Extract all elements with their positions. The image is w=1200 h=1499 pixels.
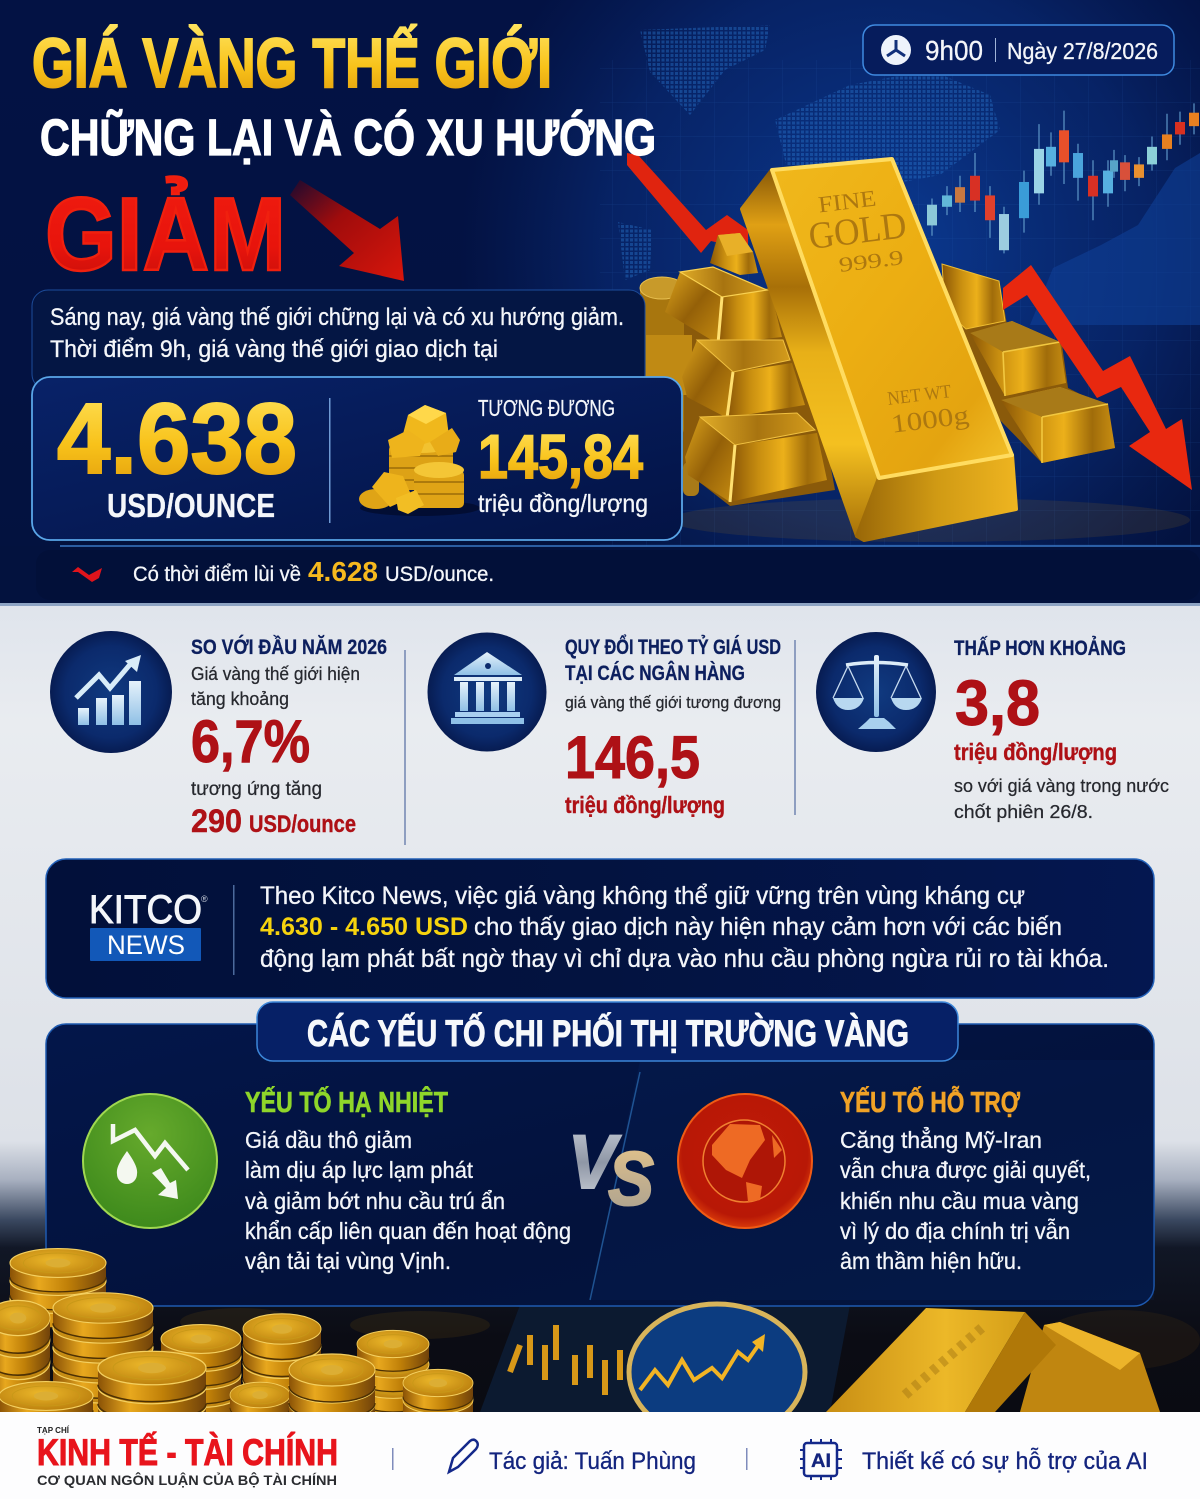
big value: 146,5 <box>565 724 700 791</box>
support text: khiến nhu cầu mua vàng <box>840 1188 1079 1214</box>
unit VND: triệu đồng/lượng <box>478 490 648 518</box>
cooling text: làm dịu áp lực lạm phát <box>245 1157 474 1183</box>
unit: USD/ounce <box>249 811 356 838</box>
coin stacks bottom left <box>0 1249 473 1439</box>
unit: triệu đồng/lượng <box>565 792 725 818</box>
unit USD/ounce: USD/OUNCE <box>107 487 275 524</box>
unit: triệu đồng/lượng <box>954 739 1117 765</box>
support text: vẫn chưa được giải quyết, <box>840 1157 1091 1183</box>
icon: AI chip: AI <box>811 1451 831 1472</box>
logo: Kitco News <box>89 888 208 961</box>
heading line 1: QUY ĐỔI THEO TỶ GIÁ USD <box>565 635 781 659</box>
logo: magazine <box>37 1426 338 1488</box>
bar engraving: NET WT <box>886 381 953 410</box>
stat column 3 <box>816 632 1169 822</box>
bar engraving: 1000g <box>889 400 970 439</box>
icon: clock <box>881 35 911 65</box>
cooling text: Giá dầu thô giảm <box>245 1127 412 1153</box>
left bar 2 <box>665 267 782 344</box>
gold bars bottom right <box>826 1308 1160 1412</box>
title: white line: CHỮNG LẠI VÀ CÓ XU HƯỚNG <box>40 108 656 166</box>
left bar 3 <box>682 340 805 418</box>
body: tăng khoảng <box>191 689 289 709</box>
cooling text: khẩn cấp liên quan đến hoạt động <box>245 1218 571 1244</box>
section heading pill <box>257 1002 958 1061</box>
author: Tác giả: Tuấn Phùng <box>489 1448 696 1475</box>
left bar top <box>710 233 758 275</box>
bottom scene <box>180 1305 1200 1412</box>
body: chốt phiên 26/8. <box>954 802 1093 822</box>
logo: magazine: TẠP CHÍ <box>37 1426 70 1435</box>
panel: factors <box>46 1024 1154 1306</box>
logo: magazine: CƠ QUAN NGÔN LUẬN CỦA BỘ TÀI CHÍNH <box>37 1471 337 1488</box>
quote line 3: động lạm phát bất ngờ thay vì chỉ dựa vào nhu cầu phòng ngừa rủi ro tài khóa. <box>260 945 1109 973</box>
price USD: 4.638 <box>57 383 297 495</box>
icon: globe <box>678 1094 812 1228</box>
quote highlight: 4.630 - 4.650 USD <box>260 913 468 941</box>
hero background <box>0 0 1200 606</box>
stat column 1 <box>50 631 387 839</box>
rear cylinder <box>640 277 699 496</box>
logo: magazine: KINH TẾ - TÀI CHÍNH <box>37 1432 338 1473</box>
footer <box>0 1412 1200 1499</box>
pile shadow mass <box>640 278 835 506</box>
title: red word: GIẢM <box>45 177 286 293</box>
icon: falling oil <box>83 1094 217 1228</box>
low point strip <box>36 550 1200 600</box>
quote line 2: cho thấy giao dịch này hiện nhạy cảm hơn với các biến <box>474 913 1062 941</box>
lower falling red arrow <box>1003 265 1192 490</box>
cooling text <box>245 1127 571 1274</box>
panel: Kitco quote <box>46 859 1154 998</box>
time badge <box>863 25 1174 75</box>
page background: light lower section <box>0 600 1200 1420</box>
vs mark: S <box>608 1137 654 1222</box>
logo: Kitco News: NEWS <box>107 930 185 960</box>
right stack backing <box>950 270 1115 463</box>
support text: vì lý do địa chính trị vẫn <box>840 1218 1070 1244</box>
heading: support factor: YẾU TỐ HỖ TRỢ <box>840 1085 1020 1119</box>
equivalent label: TƯƠNG ĐƯƠNG <box>478 395 615 421</box>
icon: growth chart <box>50 631 172 753</box>
body: so với giá vàng trong nước <box>954 776 1169 796</box>
low unit: USD/ounce. <box>385 563 494 586</box>
cooling text: vận tải tại vùng Vịnh. <box>245 1248 451 1274</box>
intro text panel <box>32 290 645 390</box>
logo: Kitco News: ® <box>201 894 208 904</box>
low text: Có thời điểm lùi về <box>133 563 301 586</box>
icon: bank <box>428 632 546 752</box>
cooling text: và giảm bớt nhu cầu trú ẩn <box>245 1188 505 1214</box>
value: 290 <box>191 803 242 839</box>
intro line 2: Thời điểm 9h, giá vàng thế giới giao dịch tại <box>50 336 498 363</box>
section heading text: CÁC YẾU TỐ CHI PHỐI THỊ TRƯỜNG VÀNG <box>307 1012 909 1054</box>
stat column 2 <box>428 632 781 818</box>
vs mark <box>568 1120 654 1222</box>
bar engraving: GOLD <box>806 204 909 258</box>
right bar middle <box>970 321 1066 396</box>
time: 9h00 <box>925 35 983 66</box>
price VND: 145,84 <box>478 423 643 492</box>
heading: THẤP HƠN KHOẢNG <box>954 637 1126 660</box>
logo: Kitco News: KITCO <box>89 888 202 932</box>
support text <box>840 1125 1091 1274</box>
red falling arrow behind gold <box>627 153 748 253</box>
bar engraving: 999.9 <box>837 245 905 277</box>
big value: 6,7% <box>191 708 310 775</box>
icon: pencil <box>449 1440 478 1472</box>
AI credit: Thiết kế có sự hỗ trợ của AI <box>862 1448 1148 1475</box>
icon: AI chip <box>800 1439 842 1480</box>
heading: SO VỚI ĐẦU NĂM 2026 <box>191 635 387 659</box>
heading line 2: TẠI CÁC NGÂN HÀNG <box>565 661 745 685</box>
support text: Căng thẳng Mỹ-Iran <box>840 1125 1042 1153</box>
candlestick chart <box>927 103 1199 253</box>
body: Giá vàng thế giới hiện <box>191 664 360 684</box>
quote line 1: Theo Kitco News, việc giá vàng không thể giữ vững trên vùng kháng cự <box>260 882 1025 910</box>
body: giá vàng thế giới tương đương <box>565 693 781 712</box>
icon: scales <box>816 632 936 752</box>
icon: gold coins and nuggets <box>359 405 480 516</box>
main price panel <box>32 377 682 540</box>
icon: down chevron <box>72 567 102 582</box>
support text: âm thầm hiện hữu. <box>840 1248 1022 1274</box>
low number: 4.628 <box>308 556 378 587</box>
magnifier with rising line <box>629 1304 805 1440</box>
heading: cooling factor: YẾU TỐ HẠ NHIỆT <box>245 1085 448 1119</box>
big gold bar <box>742 159 1016 540</box>
title: gold line: GIÁ VÀNG THẾ GIỚI <box>32 24 552 102</box>
left bar 4 <box>685 413 827 502</box>
body: tương ứng tăng <box>191 779 322 800</box>
right bar top <box>942 264 1005 329</box>
arrow: down trend next to title <box>290 180 404 281</box>
right bar bottom <box>1001 387 1115 463</box>
intro line 1: Sáng nay, giá vàng thế giới chững lại và có xu hướng giảm. <box>50 304 624 331</box>
date: Ngày 27/8/2026 <box>1007 38 1158 64</box>
vs mark: V <box>568 1120 621 1205</box>
big value: 3,8 <box>955 667 1040 739</box>
gold bar stack <box>640 233 1115 506</box>
bar engraving <box>806 186 970 439</box>
bar engraving: FINE <box>817 186 877 217</box>
